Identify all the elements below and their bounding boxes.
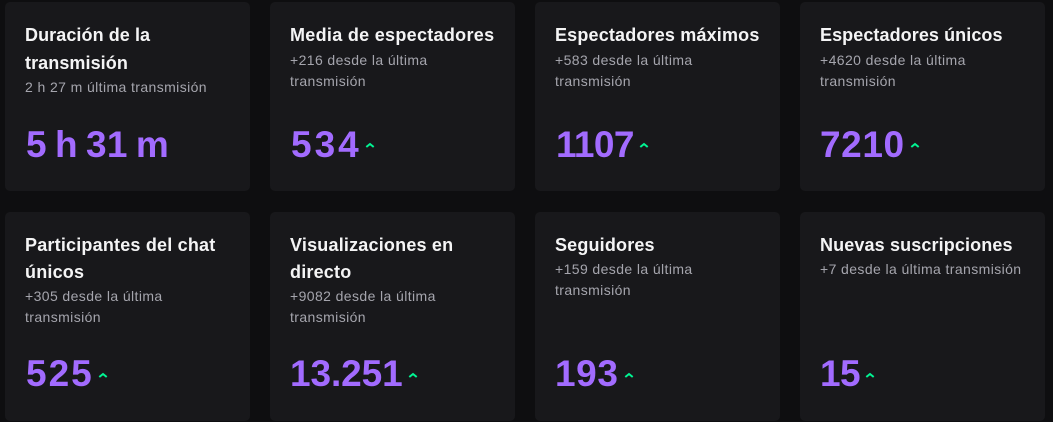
heading: transmisión [25,52,128,72]
comparison text [290,52,428,89]
comparison text [820,52,966,89]
comparison text [25,288,163,325]
panel: espectadores únicos [800,2,1045,191]
panel: espectadores máximos [535,2,780,191]
value: 15 [820,353,860,394]
panel: duración de la transmisión [5,2,250,191]
heading: únicos [25,262,84,282]
heading: Nuevas suscripciones [820,235,1013,255]
icon: up arrow [408,372,418,378]
panel: media de espectadores [270,2,515,191]
panel: seguidores [535,212,780,421]
comparison text: +216 desde la última [290,52,428,68]
value: 5 h 31 m [26,124,169,165]
comparison text: transmisión [555,73,631,89]
icon: up arrow [366,142,374,148]
comparison text: +7 desde la última transmisión [820,261,1022,277]
comparison text: +4620 desde la última [820,52,966,68]
heading: Espectadores máximos [555,25,760,45]
comparison text [290,288,436,325]
icon: up arrow [910,142,920,148]
heading [290,235,453,282]
comparison text: transmisión [290,73,366,89]
comparison text: transmisión [290,309,366,325]
value: 7210 [820,124,905,165]
comparison text: transmisión [555,282,631,298]
heading: directo [290,262,351,282]
heading: Visualizaciones en [290,235,453,255]
heading: Participantes del chat [25,235,215,255]
comparison text: +583 desde la última [555,52,693,68]
panel: visualizaciones en directo [270,212,515,421]
value: 13.251 [290,353,403,394]
heading [25,25,150,72]
value: 1107 [556,124,634,165]
icon: up arrow [624,372,634,378]
comparison text: transmisión [25,309,101,325]
value: 525 [26,353,94,394]
comparison text: 2 h 27 m última transmisión [25,79,207,95]
heading [25,235,216,282]
icon: up arrow [866,372,874,378]
heading: Seguidores [555,235,655,255]
panel: participantes del chat únicos [5,212,250,421]
value: 193 [555,353,619,394]
icon: up arrow [640,142,648,148]
comparison text [555,52,693,89]
value: 534 [291,124,362,165]
comparison text: +9082 desde la última [290,288,436,304]
icon: up arrow [98,372,108,378]
comparison text [555,261,693,298]
panel: nuevas suscripciones [800,212,1045,421]
heading: Duración de la [25,25,150,45]
comparison text: +305 desde la última [25,288,163,304]
heading: Espectadores únicos [820,25,1003,45]
comparison text: +159 desde la última [555,261,693,277]
comparison text: transmisión [820,73,896,89]
heading: Media de espectadores [290,25,494,45]
